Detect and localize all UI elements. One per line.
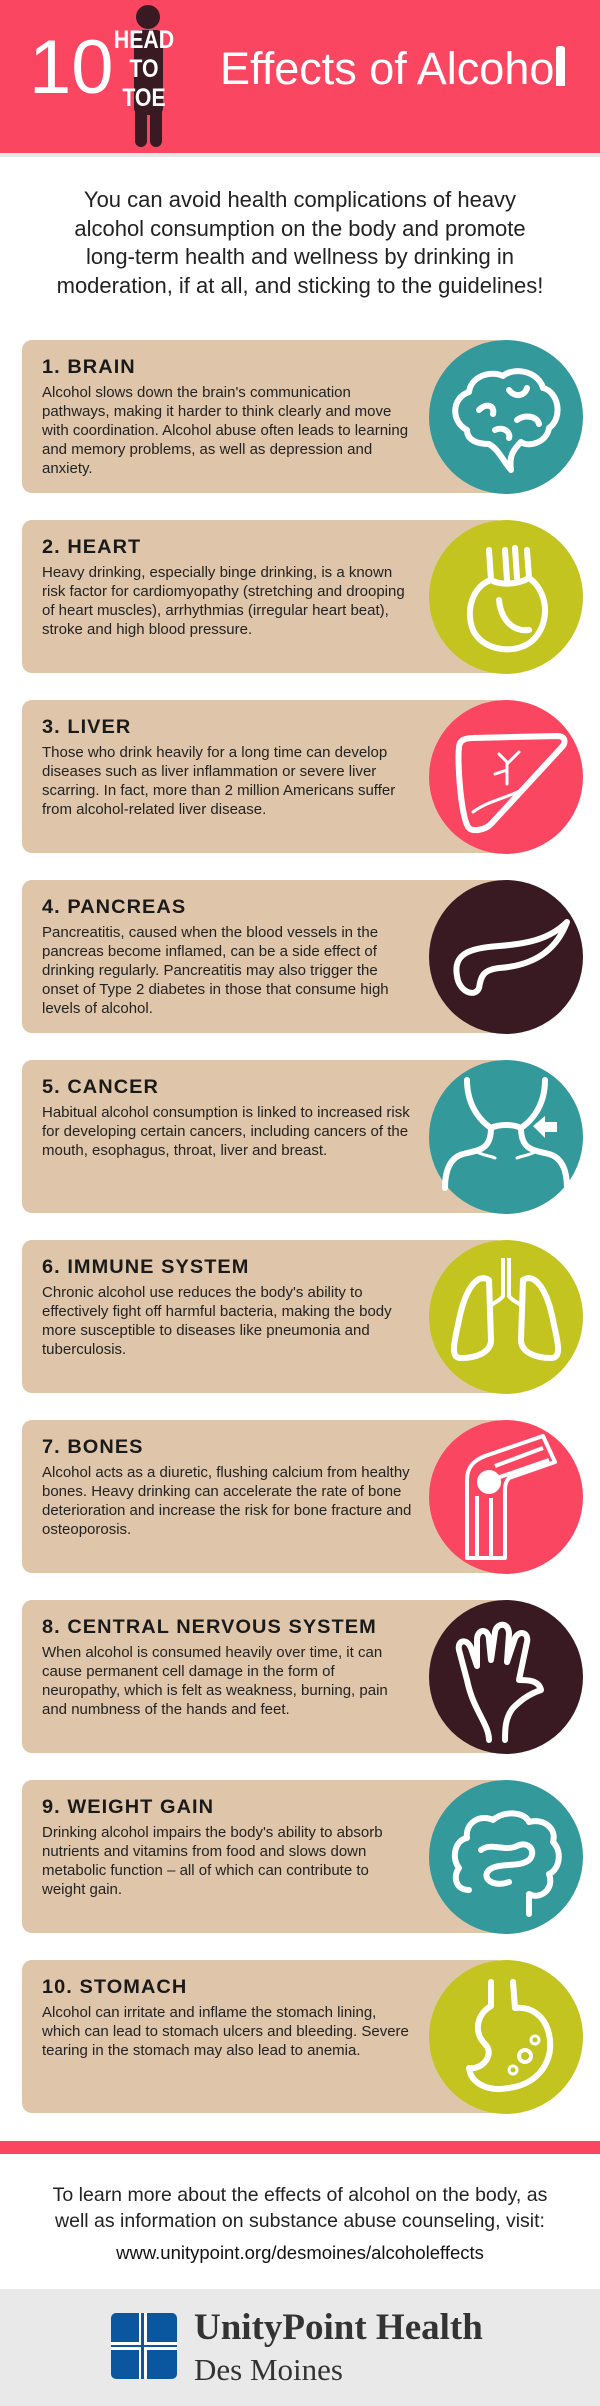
head to toe label: TOE (122, 84, 166, 112)
panel: pancreas: 4. PANCREAS (42, 897, 186, 918)
panel: pancreas: Pancreatitis, caused when the blood vessels in the pancreas become inflamed, can be a side effect of drinking regularly. Pancreatitis may also trigger the onset of Type 2 diabetes in those that consume high levels of alcohol. (42, 924, 389, 1017)
logo text: UnityPoint Health (194, 2307, 483, 2348)
panel: central nervous system: 8. CENTRAL NERVOUS SYSTEM (42, 1617, 377, 1638)
panel: brain: Alcohol slows down the brain's communication pathways, making it harder to think clearly and move with coordination. Alcohol abuse often leads to learning and memory problems, as well as depression and anxiety. (42, 384, 408, 477)
panel: stomach (22, 1960, 506, 2113)
intro text: alcohol consumption on the body and promote (74, 216, 526, 240)
intro text: moderation, if at all, and sticking to the guidelines! (57, 272, 543, 298)
panel: heart: 2. HEART (42, 537, 141, 558)
title text: Effects of Alcoho (220, 43, 554, 94)
icon: stomach (429, 1960, 583, 2114)
panel: central nervous system: When alcohol is consumed heavily over time, it can cause permanent cell damage in the form of neuropathy, which is felt as weakness, burning, pain and numbness of the hands and feet. (42, 1644, 388, 1718)
panel: bones: 7. BONES (42, 1437, 144, 1458)
panel: bones (22, 1420, 506, 1573)
panel: weight gain (22, 1780, 506, 1933)
footer text: To learn more about the effects of alcohol on the body, as (53, 2184, 547, 2206)
panel: liver: 3. LIVER (42, 717, 131, 738)
icon: person figure (134, 5, 163, 147)
head to toe label: HEAD (114, 26, 174, 54)
icon: knee (429, 1420, 583, 1574)
panel: weight gain: 9. WEIGHT GAIN (42, 1797, 214, 1818)
panel: liver: Those who drink heavily for a long time can develop diseases such as liver inflammation or severe liver scarring. In fact, more than 2 million Americans suffer from alcohol-related liver disease. (42, 744, 395, 818)
panel: liver (22, 700, 506, 853)
header banner (0, 0, 600, 153)
panel: cancer: Habitual alcohol consumption is linked to increased risk for developing certain cancers, including cancers of the mouth, esophagus, throat, liver and breast. (42, 1104, 410, 1159)
logo text: Des Moines (194, 2352, 343, 2387)
panel: immune system: 6. IMMUNE SYSTEM (42, 1257, 249, 1278)
panel: brain (22, 340, 506, 493)
icon: neck (429, 1060, 583, 1214)
panel: brain: 1. BRAIN (42, 357, 136, 378)
logo text (194, 2307, 483, 2387)
head to toe label (114, 26, 174, 112)
head to toe label: TO (129, 55, 159, 83)
panel: heart (22, 520, 506, 673)
panel: heart: Heavy drinking, especially binge drinking, is a known risk factor for cardiomyopathy (stretching and drooping of heart muscles), arrhythmias (irregular heart beat), stroke and high blood pressure. (42, 564, 405, 638)
panel: bones: Alcohol acts as a diuretic, flushing calcium from healthy bones. Heavy drinking can accelerate the rate of bone deterioration and increase the risk for bone fracture and osteoporosis. (42, 1464, 411, 1538)
intro text (57, 187, 543, 298)
number 10: 10 (29, 25, 114, 110)
panel: immune system (22, 1240, 506, 1393)
panel: cancer (22, 1060, 506, 1213)
icon: intestines (429, 1780, 583, 1934)
footer text (53, 2184, 547, 2232)
panel: immune system: Chronic alcohol use reduces the body's ability to effectively fight off harmful bacteria, making the body more susceptible to diseases like pneumonia and tuberculosis. (42, 1284, 392, 1358)
panel: pancreas (22, 880, 506, 1033)
icon: lungs (429, 1240, 583, 1394)
icon: brain (429, 340, 583, 494)
intro text: long-term health and wellness by drinking in (86, 244, 514, 269)
icon: pancreas (429, 880, 583, 1034)
panel: central nervous system (22, 1600, 506, 1753)
icon: liver (429, 700, 583, 854)
intro text: You can avoid health complications of heavy (84, 187, 516, 212)
icon: hand (429, 1600, 583, 1754)
footer url: www.unitypoint.org/desmoines/alcoholeffects (116, 2242, 484, 2263)
footer logo band (0, 2289, 600, 2406)
logo: cross square (111, 2313, 177, 2379)
panel: cancer: 5. CANCER (42, 1077, 159, 1098)
panel: stomach: 10. STOMACH (42, 1977, 187, 1998)
panel: weight gain: Drinking alcohol impairs the body's ability to absorb nutrients and vitamins from food and slows down metabolic function – all of which can contribute to weight gain. (42, 1824, 383, 1898)
panel: stomach: Alcohol can irritate and inflame the stomach lining, which can lead to stomach ulcers and bleeding. Severe tearing in the stomach may also lead to anemia. (42, 2004, 409, 2059)
footer text: well as information on substance abuse counseling, visit: (55, 2210, 545, 2232)
icon: heart (429, 520, 583, 674)
